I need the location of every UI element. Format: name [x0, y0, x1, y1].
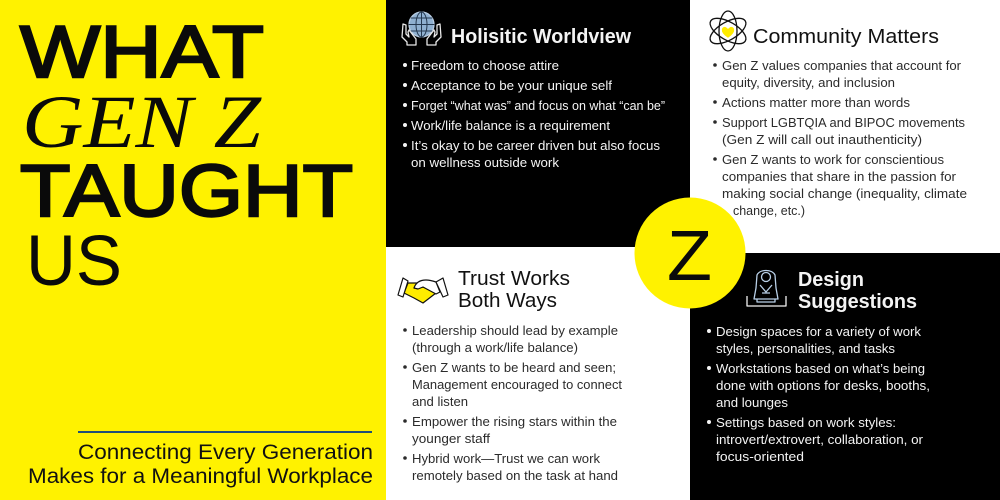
- heading: trust works both ways: Trust Works: [458, 268, 570, 290]
- list: community matters: (Gen Z will call out inauthenticity): [722, 132, 922, 147]
- list: community matters: Gen Z values companies that account for: [722, 58, 962, 73]
- list: design suggestions: introvert/extrovert, collaboration, or: [716, 432, 924, 447]
- list: holistic worldview: Acceptance to be your unique self: [411, 78, 612, 93]
- list: design suggestions: styles, personalities, and tasks: [716, 341, 895, 356]
- list: community matters: change, etc.): [733, 203, 805, 218]
- list: design suggestions: [707, 324, 930, 464]
- icon: atom with heart: [706, 11, 750, 51]
- list: trust works both ways: Leadership should lead by example: [412, 323, 618, 338]
- panel: holistic worldview: [386, 0, 690, 247]
- list: holistic worldview: [403, 58, 665, 170]
- heading: trust works both ways: [458, 268, 570, 312]
- list: design suggestions: Settings based on work styles:: [716, 415, 896, 430]
- badge: Z circle: [634, 198, 746, 308]
- list: community matters: equity, diversity, and inclusion: [722, 75, 895, 90]
- list: trust works both ways: [403, 323, 622, 483]
- list: trust works both ways: Hybrid work—Trust we can work: [412, 451, 600, 466]
- list: design suggestions: and lounges: [716, 395, 788, 410]
- panel: title: [0, 0, 386, 500]
- list: design suggestions: Workstations based on what’s being: [716, 361, 925, 376]
- heading: what gen z taught us: WHAT: [20, 12, 264, 93]
- tagline: [28, 440, 373, 488]
- tagline: Connecting Every Generation: [78, 440, 373, 464]
- panel: trust works both ways: [398, 268, 622, 483]
- list: trust works both ways: Management encouraged to connect: [412, 377, 622, 392]
- list: trust works both ways: and listen: [412, 394, 468, 409]
- list: trust works both ways: younger staff: [412, 431, 490, 446]
- list: design suggestions: done with options for desks, booths,: [716, 378, 930, 393]
- list: holistic worldview: on wellness outside work: [411, 155, 559, 170]
- list: trust works both ways: Gen Z wants to be heard and seen;: [412, 360, 616, 375]
- heading: holistic worldview: Holisitic Worldview: [451, 26, 631, 48]
- list: holistic worldview: Work/life balance is a requirement: [411, 118, 610, 133]
- list: design suggestions: focus-oriented: [716, 449, 804, 464]
- panel: design suggestions: [690, 253, 1000, 500]
- list: community matters: making social change (inequality, climate: [722, 186, 967, 201]
- tagline: Makes for a Meaningful Workplace: [28, 464, 373, 488]
- list: community matters: Actions matter more than words: [722, 95, 910, 110]
- list: trust works both ways: (through a work/life balance): [412, 340, 578, 355]
- list: holistic worldview: Freedom to choose attire: [411, 58, 559, 73]
- heading: what gen z taught us: [20, 12, 353, 301]
- icon: globe in hands: [402, 12, 441, 45]
- list: community matters: Support LGBTQIA and BIPOC movements: [722, 115, 965, 130]
- heading: what gen z taught us: TAUGHT: [20, 151, 353, 232]
- badge: Z circle: Z: [667, 217, 712, 296]
- heading: what gen z taught us: US: [26, 222, 122, 301]
- list: community matters: companies that share in the passion for: [722, 169, 957, 184]
- icon: seated figure: [747, 270, 786, 306]
- heading: community matters: Community Matters: [753, 26, 939, 48]
- heading: design suggestions: Suggestions: [798, 291, 917, 313]
- list: design suggestions: Design spaces for a variety of work: [716, 324, 921, 339]
- list: holistic worldview: Forget “what was” and focus on what “can be”: [411, 98, 665, 113]
- heading: trust works both ways: Both Ways: [458, 290, 557, 312]
- list: trust works both ways: Empower the rising stars within the: [412, 414, 617, 429]
- footer rule: [78, 431, 372, 433]
- list: community matters: Gen Z wants to work for conscientious: [722, 152, 944, 167]
- list: community matters: [713, 58, 967, 218]
- heading: what gen z taught us: GEN Z: [22, 81, 262, 164]
- list: trust works both ways: remotely based on the task at hand: [412, 468, 618, 483]
- heading: design suggestions: [798, 269, 917, 313]
- heading: design suggestions: Design: [798, 269, 864, 291]
- icon: handshake: [398, 278, 448, 303]
- panel: community matters: [706, 11, 967, 218]
- list: holistic worldview: It’s okay to be career driven but also focus: [411, 138, 660, 153]
